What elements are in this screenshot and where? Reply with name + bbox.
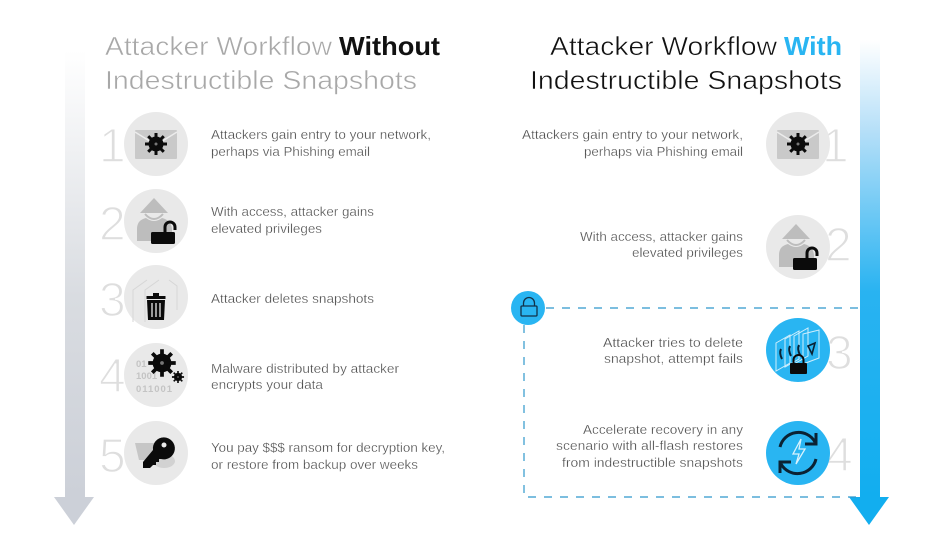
- left step 5 text: You pay $$$ ransom for decryption key,: [211, 440, 445, 455]
- left step 5 text: or restore from backup over weeks: [211, 457, 419, 472]
- right step 3: [766, 318, 853, 382]
- right step 2 text: elevated privileges: [632, 245, 744, 260]
- right step 1 text: perhaps via Phishing email: [584, 144, 743, 159]
- arrow: right workflow (blue): [849, 40, 889, 525]
- right step 4 text: scenario with all-flash restores: [556, 438, 744, 453]
- arrow: left workflow (grey): [54, 50, 94, 525]
- left step 1 text: [211, 127, 431, 159]
- left step 3 text: Attacker deletes snapshots: [211, 291, 375, 306]
- left step 5: 5: [99, 430, 126, 483]
- icon: attacker with open lock: [137, 198, 175, 244]
- heading: without snapshots: [105, 31, 440, 95]
- left step 3: 3: [99, 274, 126, 327]
- icon: locked snapshots: [776, 328, 819, 374]
- icon: trash can: [133, 280, 177, 322]
- icon: decryption key: [135, 437, 175, 468]
- left step 4: 4: [99, 350, 126, 403]
- heading: without snapshots: Attacker Workflow: [105, 31, 332, 61]
- left step 4: [99, 343, 188, 407]
- right step 2: [766, 215, 852, 279]
- left step 1: 1: [99, 120, 126, 173]
- right step 2 text: [580, 229, 744, 260]
- left step 1 text: perhaps via Phishing email: [211, 144, 370, 159]
- right step 1: [766, 112, 849, 176]
- heading: without snapshots: Indestructible Snapshots: [105, 65, 417, 95]
- heading: with snapshots: Indestructible Snapshots: [530, 65, 842, 95]
- left step 4 text: Malware distributed by attacker: [211, 361, 400, 376]
- right step 1 text: Attackers gain entry to your network,: [522, 127, 743, 142]
- left step 2 text: [211, 204, 375, 236]
- icon: padlock badge: [511, 291, 545, 325]
- protected zone dashed frame: [524, 308, 858, 497]
- right step 3: 3: [826, 327, 853, 380]
- left step 2: [99, 189, 188, 253]
- icon: malware gears over binary digits: 011001: [136, 384, 173, 395]
- right step 4: 4: [826, 429, 853, 482]
- icon: malware gears over binary digits: 1001: [136, 371, 158, 382]
- icon: malware gears over binary digits: [136, 344, 187, 395]
- right step 4 text: [556, 422, 744, 470]
- left step 1 text: Attackers gain entry to your network,: [211, 127, 431, 142]
- icon: rapid restore cycle: [780, 432, 816, 474]
- left step 4 text: encrypts your data: [211, 377, 324, 392]
- left step 1: [99, 112, 188, 176]
- left step 2: 2: [99, 198, 126, 251]
- icon: malware gears over binary digits: 01: [136, 359, 147, 370]
- right step 3 text: [603, 335, 744, 366]
- icon: phishing email: [777, 128, 819, 160]
- left step 2 text: elevated privileges: [211, 221, 323, 236]
- icon: attacker with open lock: [779, 224, 817, 270]
- right step 3 text: snapshot, attempt fails: [604, 351, 744, 366]
- left step 3: [99, 265, 188, 329]
- left step 5 text: [211, 440, 445, 472]
- heading: with snapshots: [530, 31, 842, 95]
- right step 3 text: Attacker tries to delete: [603, 335, 743, 350]
- left step 2 text: With access, attacker gains: [211, 204, 375, 219]
- right step 2: 2: [825, 219, 852, 272]
- left step 4 text: [211, 361, 400, 392]
- icon: phishing email: [135, 128, 177, 160]
- right step 2 text: With access, attacker gains: [580, 229, 744, 244]
- heading: with snapshots: Attacker Workflow: [550, 31, 777, 61]
- right step 1: 1: [822, 120, 849, 173]
- right step 4 text: Accelerate recovery in any: [583, 422, 744, 437]
- left step 5: [99, 421, 188, 485]
- right step 1 text: [522, 127, 743, 159]
- heading: without snapshots: Without: [339, 31, 440, 61]
- right step 4 text: from indestructible snapshots: [562, 455, 744, 470]
- heading: with snapshots: With: [784, 31, 842, 61]
- right step 4: [766, 421, 853, 485]
